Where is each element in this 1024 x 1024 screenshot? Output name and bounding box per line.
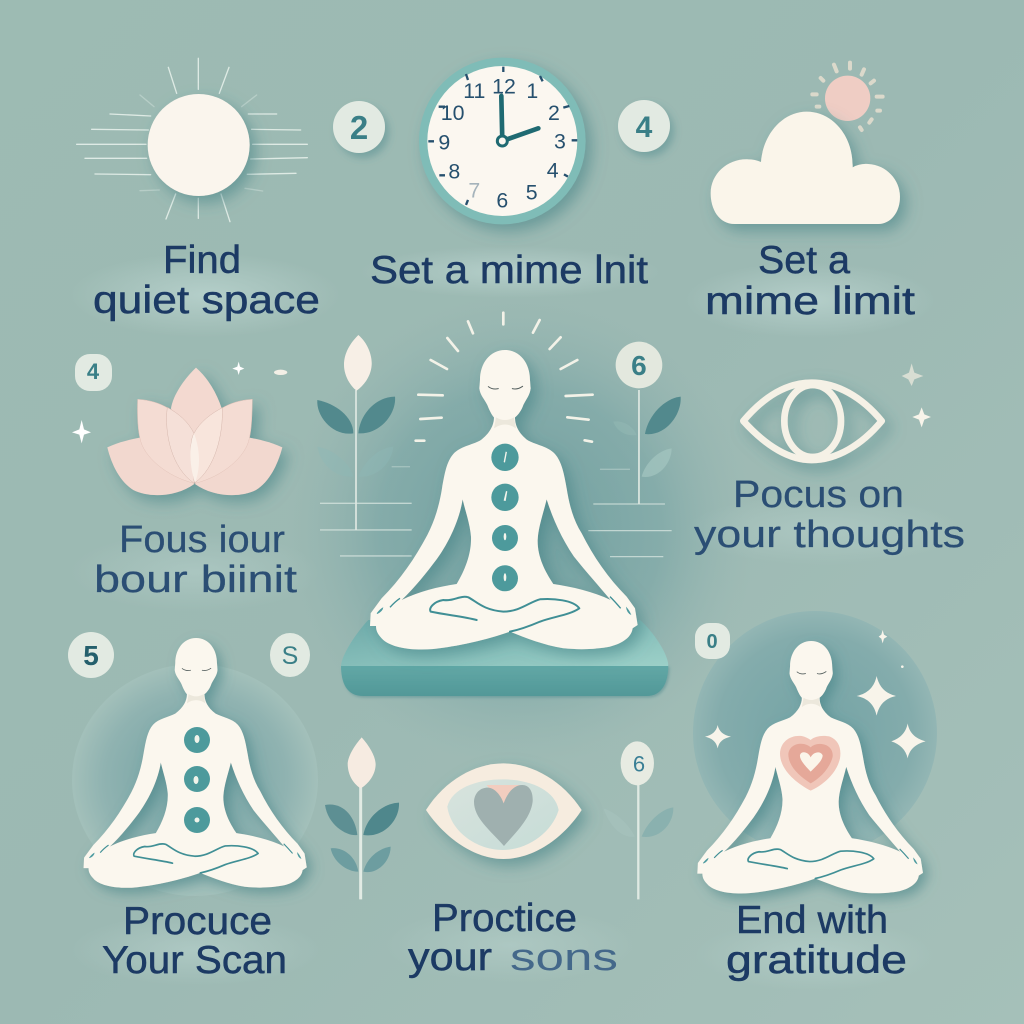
badge: number 4 top: 4 (636, 111, 653, 144)
heading: find: Find (163, 239, 241, 282)
backdrop circle (693, 611, 937, 855)
badge: number 5: 5 (83, 640, 99, 671)
icon: clock: 10 (441, 101, 465, 125)
right small stem with badge (603, 741, 673, 899)
badge: letter S (270, 633, 310, 677)
step 2: clock and label (360, 58, 660, 298)
badge: number 2 (333, 101, 385, 153)
badge: number 4 top (618, 100, 670, 152)
icon: eye outline (743, 363, 931, 460)
figure (84, 638, 307, 888)
heart on chest (780, 736, 840, 791)
heading: set a: Set a (758, 239, 850, 282)
step 3: cloud and label (685, 63, 935, 338)
heading: your scan: Your Scan (102, 939, 287, 982)
heading: quiet space: quiet space (93, 279, 320, 322)
heading: focus your: Fous iour (119, 519, 285, 561)
badge: number 0 (695, 623, 730, 659)
icon: clock: 12 (492, 74, 516, 98)
icon: clock: 8 (448, 159, 460, 183)
heading: your: your (408, 936, 492, 979)
centre glow (285, 295, 755, 765)
icon: clock: 4 (547, 158, 559, 182)
chakra dots (491, 444, 519, 591)
right plant with number 6: 6 (631, 350, 647, 381)
heading: gratitude: gratitude (726, 939, 907, 982)
left plant (317, 335, 412, 556)
badge: number 5 (68, 632, 114, 678)
badge: letter S: S (282, 642, 298, 670)
garbled word: sons (510, 937, 618, 979)
badge: number 4 left: 4 (87, 359, 100, 384)
chakra dots (184, 727, 210, 833)
figure (370, 350, 638, 649)
step 1: find quiet space (70, 58, 340, 337)
heading: mime limit: mime limit (705, 280, 915, 323)
heading: proctice: Proctice (432, 897, 577, 940)
heading: set a time limit: Set a mime lnit (370, 249, 648, 292)
right plant with number 6 (588, 342, 681, 557)
icon: clock: 2 (548, 101, 560, 125)
central meditating figure on cushion (341, 350, 668, 696)
sparkles (705, 630, 926, 758)
cushion (341, 620, 668, 696)
heading: pocus on: Pocus on (733, 474, 904, 516)
left small plant (325, 737, 399, 899)
heading: your breath: bour biinit (94, 559, 298, 601)
icon: clock: 1 (526, 79, 538, 103)
icon: clock (419, 58, 586, 224)
step 4: lotus and label (70, 362, 320, 612)
icon: clock: 11 (463, 79, 485, 103)
icon: cloud with pink sun (711, 63, 900, 224)
step 6: body scan figure and label (70, 638, 320, 986)
step 8: gratitude figure and label (693, 611, 937, 991)
icon: clock: 9 (438, 130, 450, 154)
heading: your thoughts: your thoughts (694, 514, 965, 556)
rays around central figure (416, 313, 593, 442)
right small stem with badge: 6 (633, 752, 645, 777)
backdrop circle (72, 664, 318, 896)
icon: clock: 6 (496, 188, 508, 212)
badge: number 0: 0 (706, 631, 718, 653)
step 5: eye and label (685, 363, 965, 565)
heading: procuce: Procuce (123, 900, 272, 943)
icon: clock: 3 (554, 130, 566, 154)
heading: end with: End with (736, 899, 888, 942)
icon: clock: 7 (468, 178, 480, 202)
badge: number 4 left (75, 354, 112, 391)
figure (697, 641, 923, 893)
step 7: heart eye, plants and label (325, 737, 673, 983)
eye with heart (426, 763, 582, 859)
icon: clock: 5 (526, 180, 538, 204)
badge: number 2: 2 (350, 109, 368, 146)
icon: sun with rays (77, 58, 307, 222)
icon: lotus (72, 362, 287, 495)
